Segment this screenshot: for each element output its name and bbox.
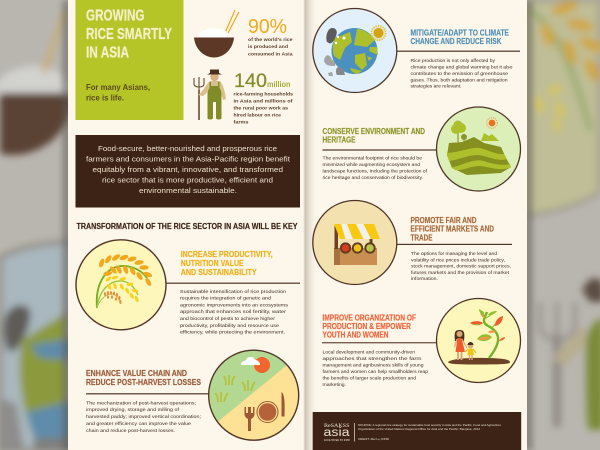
icon: grass bbox=[215, 375, 255, 402]
heading: CONSERVE ENVIRONMENT AND bbox=[322, 126, 425, 136]
title: IN ASIA bbox=[86, 44, 129, 62]
heading: INCREASE PRODUCTIVITY, bbox=[181, 249, 273, 259]
body text bbox=[86, 400, 201, 434]
body text: information. bbox=[411, 276, 438, 282]
body text: requires the integration of genetic and bbox=[180, 296, 271, 302]
heading: PROMOTE FAIR AND bbox=[410, 215, 476, 225]
body text bbox=[322, 156, 428, 181]
panel: conserve environment bbox=[322, 107, 520, 191]
page shadow bbox=[62, 0, 533, 450]
intro statement panel: rice sector that is more productive, efficient and bbox=[102, 175, 273, 184]
intro statement panel: farmers and consumers in the Asia-Pacific region benefit bbox=[86, 154, 291, 163]
footer bbox=[313, 412, 521, 450]
page fold bbox=[303, 0, 318, 450]
title bbox=[86, 8, 172, 62]
body text: stock management, domestic support prices, bbox=[411, 264, 511, 270]
body text: rice heritage and conservation of biodiversity. bbox=[322, 175, 423, 181]
stat: 90 percent bbox=[248, 15, 293, 56]
icon: rice bowl bbox=[194, 10, 239, 58]
body text: volatility of rice prices include trade policy, bbox=[411, 257, 505, 263]
source and credit bbox=[358, 423, 501, 441]
heading: HERITAGE bbox=[322, 135, 356, 145]
body text: approaches that strengthen the farm bbox=[322, 356, 422, 362]
heading: ENHANCE VALUE CHAIN AND bbox=[86, 368, 187, 378]
heading: PRODUCTION & EMPOWER bbox=[322, 321, 412, 331]
stat: 140 million: million bbox=[267, 80, 291, 89]
logo: asia bbox=[324, 427, 350, 439]
stat: 140 million: in Asia and millions of bbox=[234, 98, 293, 104]
body text: The mechanization of post-harvest operations; bbox=[86, 400, 196, 406]
title panel bbox=[76, 0, 184, 120]
intro statement panel: Food-secure, better-nourished and prosperous rice bbox=[98, 144, 277, 153]
section heading: TRANSFORMATION OF THE RICE SECTOR IN ASIA WILL BE KEY bbox=[76, 221, 298, 231]
stat: 90 percent: is produced and bbox=[248, 44, 288, 49]
body text: chain and reduce post-harvest losses. bbox=[86, 428, 175, 434]
heading: EFFICIENT MARKETS AND bbox=[410, 224, 494, 234]
panel: enhance value chain bbox=[86, 350, 299, 440]
stat: 90 percent: consumed in Asia bbox=[248, 52, 293, 56]
heading: TRADE bbox=[410, 232, 433, 242]
panel: increase productivity bbox=[76, 240, 300, 336]
body text: Sustainable intensification of rice production bbox=[180, 289, 286, 295]
body text: futures markets and the provision of market bbox=[411, 270, 510, 276]
icon: sun bbox=[371, 26, 386, 40]
body text: and biocontrol of pests to achieve higher bbox=[180, 316, 275, 322]
background: earth circle bbox=[0, 242, 80, 450]
body text: minimized while augmenting ecosystem and bbox=[322, 162, 420, 168]
subtitle: For many Asians, bbox=[86, 83, 150, 92]
body text: Local development and community-driven bbox=[322, 349, 415, 355]
icon: earth bbox=[332, 28, 378, 74]
intro statement panel bbox=[76, 135, 300, 208]
logo: ReSAKSS bbox=[324, 423, 350, 429]
stat: 140 million: hired labour on rice bbox=[234, 112, 281, 118]
body text: harvested paddy; improved vertical coordination; bbox=[86, 414, 201, 420]
body text: the benefits of larger scale production and bbox=[322, 376, 416, 382]
heading: IMPROVE ORGANIZATION OF bbox=[322, 312, 416, 322]
panel: mitigate and adapt bbox=[313, 8, 520, 92]
icon: rice stalks bbox=[97, 253, 153, 308]
icon: market stall bbox=[334, 224, 380, 265]
title: RICE SMARTLY bbox=[86, 26, 172, 43]
heading: CHANGE AND REDUCE RISK bbox=[410, 36, 502, 46]
body text: farmers and women can help smallholders reap bbox=[322, 369, 428, 375]
icon: smoke clouds bbox=[324, 28, 345, 76]
source and credit: SOURCE: A regional rice strategy for sustainable food security in Asia and the Pacific, Food and Agriculture bbox=[358, 423, 501, 427]
icon: terraced hills bbox=[447, 118, 511, 175]
body text bbox=[322, 349, 428, 388]
background: bowl bbox=[0, 12, 76, 155]
heading: REDUCE POST-HARVEST LOSSES bbox=[86, 377, 201, 387]
body text bbox=[410, 58, 513, 90]
heading: NUTRITION VALUE bbox=[181, 258, 244, 268]
body text: approach that enhances soil fertility, water bbox=[180, 309, 286, 315]
icon: woman bbox=[454, 330, 467, 360]
brochure page bbox=[68, 0, 527, 450]
background: rice plate bbox=[520, 0, 600, 216]
stat: 140 million: 140 bbox=[234, 70, 267, 92]
body text: contributes to the emission of greenhouse bbox=[410, 71, 508, 77]
icon: sun and cloud bbox=[241, 357, 270, 373]
body text: improved drying, storage and milling of bbox=[86, 407, 180, 413]
body text: efficiency, while protecting the environment. bbox=[180, 330, 285, 336]
source and credit: CREDIT: Mei Lu, IFPRI bbox=[358, 437, 389, 441]
stat: 140 million bbox=[234, 70, 293, 124]
logo bbox=[324, 423, 350, 442]
heading bbox=[86, 368, 201, 387]
stat: 90 percent: 90% bbox=[248, 15, 287, 38]
body text: climate change and global warming but it also bbox=[410, 65, 513, 71]
panel: fair and efficient markets bbox=[313, 200, 512, 284]
body text: strategies are relevant. bbox=[410, 84, 462, 90]
background: farmer bbox=[540, 278, 600, 430]
body text: gases. Thus, both adaptation and mitigation bbox=[410, 77, 508, 83]
intro statement panel: equitably from a vibrant, innovative, and transformed bbox=[92, 165, 283, 174]
source and credit: Organization of the United Nations Regional Office for Asia and the Pacific, Bangkok, 2014 bbox=[358, 427, 480, 431]
icon: soil bbox=[448, 358, 510, 364]
logo: FACILITATED BY IFPRI bbox=[324, 439, 350, 442]
body text: productivity, profitability and resource use bbox=[180, 323, 279, 329]
intro statement panel: environmental sustainable. bbox=[139, 186, 237, 195]
stat: 140 million: farms bbox=[234, 120, 249, 124]
heading bbox=[181, 249, 273, 277]
body text: and greater efficiency can improve the value bbox=[86, 421, 191, 427]
stat: 140 million: rice-farming households bbox=[234, 92, 293, 96]
heading bbox=[322, 312, 416, 340]
body text: The options for managing the level and bbox=[411, 251, 497, 257]
body text: agronomic improvements into an ecosystems bbox=[180, 302, 289, 308]
icon: growing plant bbox=[470, 309, 505, 358]
title: GROWING bbox=[86, 8, 144, 24]
body text bbox=[180, 289, 289, 336]
icon: child bbox=[465, 342, 476, 360]
stat: 140 million: the rural poor work as bbox=[234, 106, 288, 110]
body text: landscape functions, including the protection of bbox=[322, 169, 428, 175]
body text: Rice production is not only affected by bbox=[410, 58, 496, 64]
heading bbox=[410, 28, 509, 46]
body text: marketing. bbox=[322, 382, 346, 388]
body text bbox=[411, 251, 511, 282]
heading bbox=[322, 126, 425, 145]
heading bbox=[410, 215, 494, 242]
subtitle bbox=[86, 83, 150, 102]
heading: YOUTH AND WOMEN bbox=[322, 330, 388, 340]
heading: MITIGATE/ADAPT TO CLIMATE bbox=[410, 28, 509, 38]
icon: farmer bbox=[194, 70, 226, 120]
body text: management and agribusiness skills of young bbox=[322, 362, 424, 368]
panel: organization, youth and women bbox=[322, 298, 520, 388]
body text: The environmental footprint of rice should be bbox=[322, 156, 422, 162]
icon: fork, plate, knife bbox=[244, 392, 285, 431]
heading: AND SUSTAINABILITY bbox=[181, 267, 257, 277]
stat: 90 percent: of the world's rice bbox=[248, 37, 293, 42]
subtitle: rice is life. bbox=[86, 94, 124, 102]
